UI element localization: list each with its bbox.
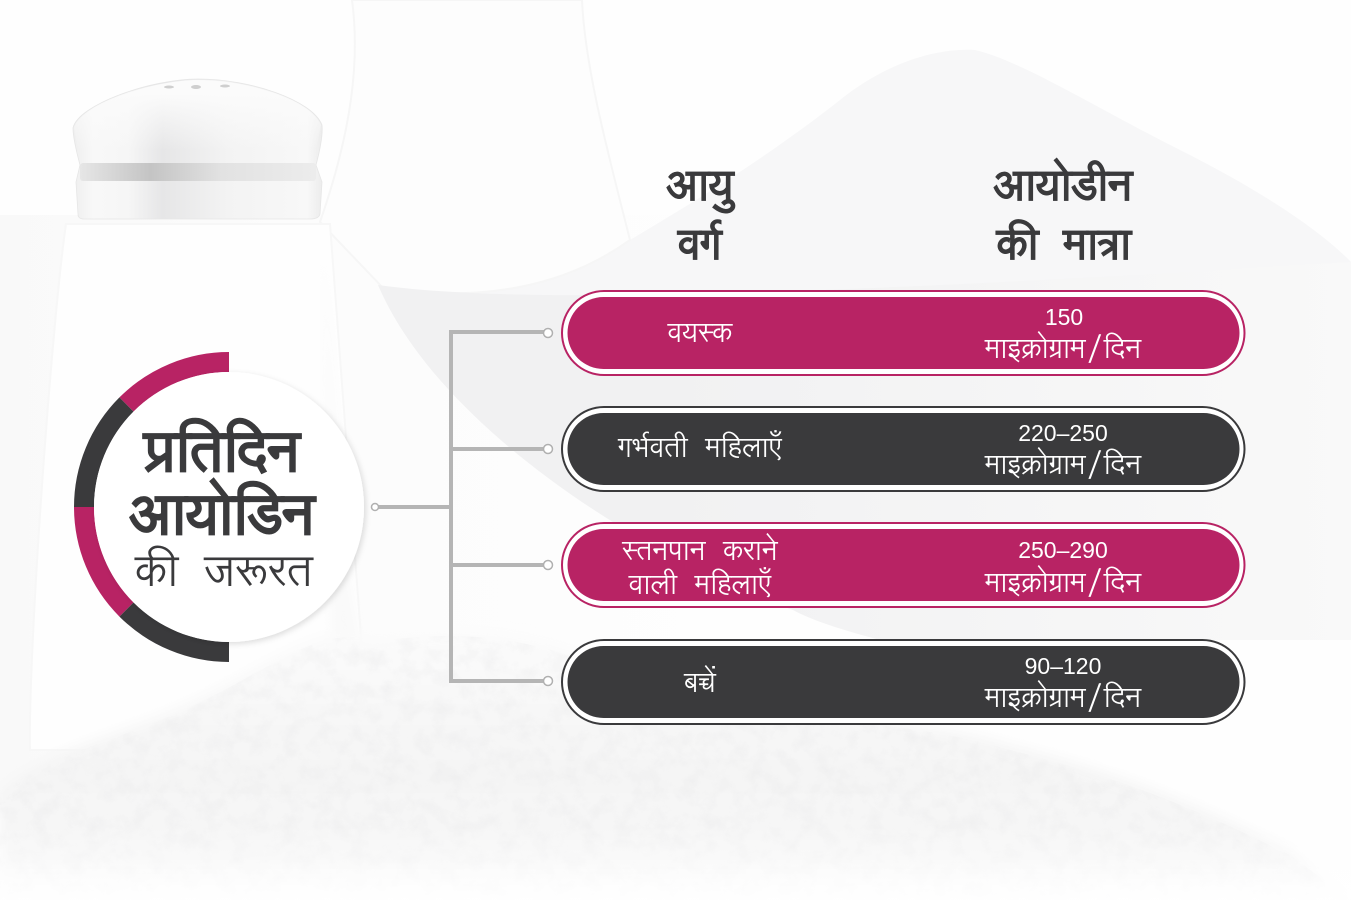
row: adults: 150 [1045, 304, 1083, 330]
title line 2: आयोडिन [129, 474, 317, 563]
column heading: iodine amount: की मात्रा [995, 214, 1133, 281]
row: lactating women: माइक्रोग्राम/दिन [984, 562, 1142, 606]
cap band [80, 163, 316, 181]
row: adults: वयस्क [667, 312, 733, 356]
ring with coloured arcs [84, 362, 229, 652]
row: children: माइक्रोग्राम/दिन [984, 677, 1142, 721]
row: lactating women: स्तनपान कराने [621, 530, 779, 574]
background: salt mound behind [440, 50, 1351, 300]
background: shaker body [30, 224, 363, 750]
row: lactating women: वाली महिलाएँ [628, 564, 772, 608]
background: glass jar [320, 0, 630, 293]
row: pregnant women: 220–250 [1018, 420, 1108, 446]
background: bowl [378, 262, 1351, 640]
title line 3: की जरूरत [134, 539, 314, 609]
row: adults: माइक्रोग्राम/दिन [984, 328, 1142, 372]
row: lactating women: 250–290 [1018, 537, 1108, 563]
row: children: 90–120 [1025, 653, 1101, 679]
salt shaker cap [73, 79, 322, 219]
connector lines [372, 328, 552, 686]
background: table wash [0, 215, 800, 805]
row: pregnant women: माइक्रोग्राम/दिन [984, 444, 1142, 488]
central white circle with title [94, 372, 364, 642]
column heading: iodine amount [994, 155, 1134, 281]
column heading: age group [666, 155, 735, 281]
cap holes [164, 84, 230, 89]
row: pregnant women [562, 407, 1244, 491]
row: children [562, 640, 1244, 724]
column heading: age group: वर्ग [676, 214, 724, 281]
column heading: iodine amount: आयोडीन [994, 155, 1134, 222]
row: lactating women [562, 523, 1244, 608]
title line 1: प्रतिदिन [142, 411, 302, 500]
row: children: बच्चें [683, 662, 717, 706]
column heading: age group: आयु [666, 155, 735, 222]
row: adults [562, 291, 1244, 375]
row: pregnant women: गर्भवती महिलाएँ [617, 427, 783, 471]
background: salt pile [0, 631, 1351, 900]
